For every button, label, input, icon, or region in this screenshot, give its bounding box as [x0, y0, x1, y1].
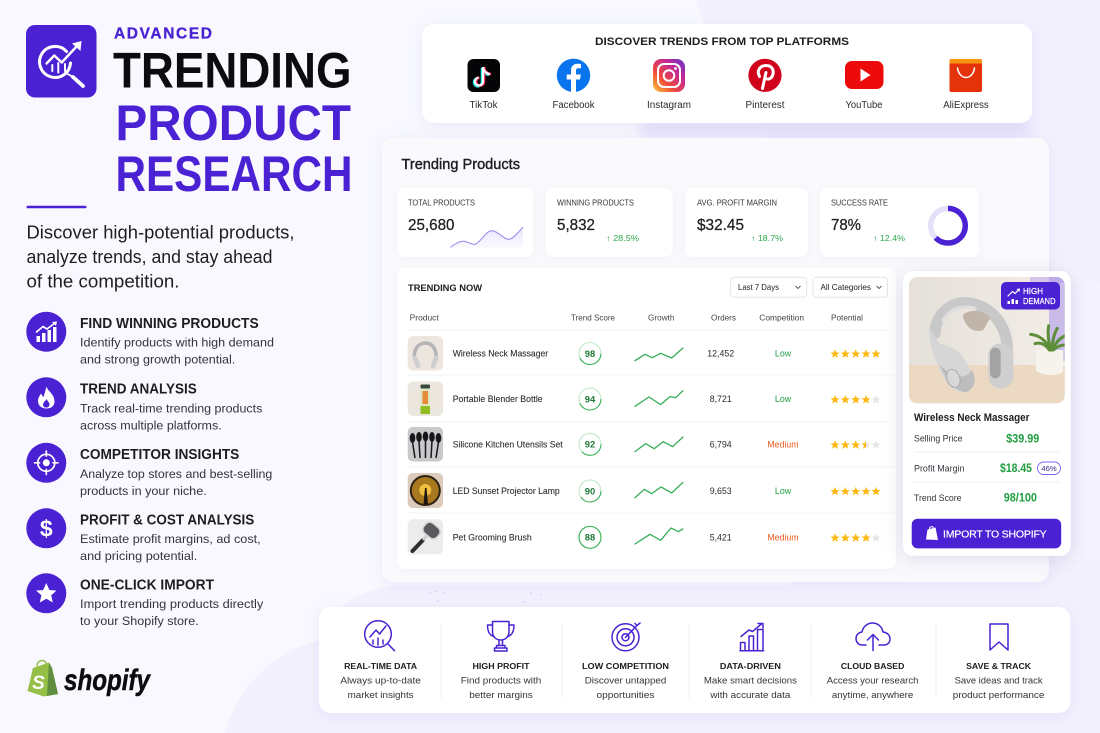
row: wireless neck massager: Wireless Neck Massager [453, 348, 548, 358]
benefit: high profit [461, 622, 541, 700]
panel: platforms [422, 24, 1032, 123]
icon: Facebook: Facebook [552, 100, 595, 111]
stat card: winning products [546, 188, 673, 257]
row: wireless neck massager [408, 336, 881, 370]
row: led sunset projector lamp: LED Sunset Projector Lamp [453, 486, 560, 496]
stat card: total products: TOTAL PRODUCTS [408, 198, 475, 208]
benefit: data-driven [704, 624, 797, 700]
detail: selling price [914, 433, 1039, 445]
feature: find winning products: and strong growth potential. [80, 352, 235, 366]
intro paragraph [26, 222, 294, 292]
feature: competitor insights [26, 443, 272, 498]
detail: profit margin: $18.45 [1000, 463, 1033, 475]
thumbnail: utensils [408, 427, 443, 462]
detail: selling price: $39.99 [1006, 433, 1039, 445]
row: silicone kitchen utensils set: Medium [767, 440, 799, 450]
feature: one-click import [26, 573, 264, 628]
feature: profit and cost analysis [26, 508, 261, 563]
row: portable blender bottle: 8,721 [710, 394, 732, 404]
row: portable blender bottle: 94 [585, 393, 596, 404]
icon: Pinterest: Pinterest [746, 100, 785, 111]
table heading: TRENDING NOW [408, 283, 482, 294]
thumbnail: lamp [408, 473, 443, 508]
table header row [410, 314, 863, 322]
feature: competitor insights: COMPETITOR INSIGHTS [80, 447, 239, 463]
benefit: real-time data [340, 621, 421, 700]
benefit: high profit: Find products with [461, 676, 541, 686]
benefit: data-driven: Make smart decisions [704, 676, 797, 686]
icon: YouTube: YouTube [846, 100, 883, 111]
intro paragraph: of the competition. [26, 272, 179, 292]
badge: high demand: DEMAND [1023, 296, 1056, 306]
icon: AliExpress: AliExpress [943, 100, 989, 111]
benefit: real-time data: REAL-TIME DATA [344, 661, 417, 671]
row: led sunset projector lamp: Low [775, 486, 792, 496]
intro paragraph: analyze trends, and stay ahead [26, 247, 272, 267]
benefit: high profit: better margins [469, 690, 533, 700]
benefit: cloud based [827, 623, 918, 700]
stat card: winning products: ↑ 28.5% [606, 233, 640, 243]
icon: YouTube [845, 61, 884, 111]
title: RESEARCH [116, 146, 352, 202]
feature: profit and cost analysis: $ [40, 516, 53, 542]
thumbnail: brush [408, 519, 443, 554]
row: silicone kitchen utensils set: 92 [585, 439, 595, 450]
title [113, 26, 352, 202]
row: led sunset projector lamp: 90 [585, 485, 595, 496]
table header row: Growth [648, 314, 674, 322]
detail: profit margin: Profit Margin [914, 464, 964, 474]
feature: trend analysis: TREND ANALYSIS [80, 382, 197, 398]
row: wireless neck massager: Low [775, 348, 792, 358]
table header row: Potential [831, 314, 863, 322]
table header row: Trend Score [571, 314, 616, 322]
benefit: save and track: Save ideas and track [955, 676, 1043, 686]
feature: profit and cost analysis: PROFIT & COST ANALYSIS [80, 512, 254, 528]
table header row: Product [410, 314, 440, 322]
row: pet grooming brush [408, 519, 881, 554]
detail: trend score: 98/100 [1004, 493, 1037, 505]
stat card: winning products: 5,832 [557, 217, 595, 234]
feature: trend analysis [26, 377, 262, 432]
row: pet grooming brush: 88 [585, 532, 595, 543]
row: pet grooming brush: 5,421 [710, 532, 732, 542]
panel: product detail card [903, 271, 1071, 556]
icon: TikTok: TikTok [470, 100, 498, 111]
icon: TikTok [468, 59, 500, 111]
icon: Facebook [552, 59, 595, 111]
stat card: success rate [820, 188, 979, 257]
intro paragraph: Discover high-potential products, [26, 222, 294, 242]
logo icon [26, 25, 96, 98]
feature: one-click import: ONE-CLICK IMPORT [80, 578, 214, 594]
benefit: save and track [953, 624, 1044, 700]
badge: high demand [1001, 282, 1060, 310]
detail: trend score: Trend Score [914, 493, 962, 503]
icon: Instagram: Instagram [647, 100, 691, 111]
shopify logo: S [32, 673, 45, 694]
row: portable blender bottle: Low [775, 394, 792, 404]
feature: competitor insights: Analyze top stores and best-selling [80, 467, 272, 481]
panel: trending table [397, 268, 896, 569]
product name: Wireless Neck Massager [914, 412, 1030, 424]
stat card: total products [398, 188, 534, 257]
detail: selling price: Selling Price [914, 434, 962, 444]
shopify logo: shopify [64, 664, 151, 697]
button: import to shopify: IMPORT TO SHOPIFY [943, 528, 1047, 540]
feature: find winning products [26, 312, 274, 366]
benefit: real-time data: Always up-to-date [340, 676, 421, 686]
feature: one-click import: Import trending products directly [80, 597, 264, 611]
title: PRODUCT [116, 95, 351, 151]
benefit: real-time data: market insights [348, 690, 414, 700]
benefit: save and track: SAVE & TRACK [966, 661, 1032, 671]
feature: find winning products: FIND WINNING PRODUCTS [80, 316, 259, 332]
row: portable blender bottle: Portable Blender Bottle [453, 394, 543, 404]
benefit: low competition: Discover untapped [585, 676, 666, 686]
row: silicone kitchen utensils set: Silicone Kitchen Utensils Set [453, 440, 563, 450]
feature: profit and cost analysis: Estimate profit margins, ad cost, [80, 532, 261, 546]
benefit: cloud based: anytime, anywhere [832, 690, 913, 700]
benefit: low competition: opportunities [596, 690, 655, 700]
benefit: data-driven: DATA-DRIVEN [720, 661, 781, 671]
dropdown: date range [731, 277, 807, 297]
feature: trend analysis: Track real-time trending products [80, 401, 262, 415]
benefit: data-driven: with accurate data [709, 690, 790, 700]
detail: profit margin [914, 462, 1060, 475]
row: wireless neck massager: 98 [585, 348, 595, 359]
badge: high demand: HIGH [1023, 286, 1043, 296]
row: led sunset projector lamp: 9,653 [710, 486, 732, 496]
button: import to shopify [912, 519, 1061, 548]
panel: dashboard [382, 138, 1049, 582]
stat card: success rate: SUCCESS RATE [831, 198, 888, 208]
dropdown: category [813, 277, 888, 297]
row: silicone kitchen utensils set [408, 427, 881, 462]
stat card: average profit margin: AVG. PROFIT MARGIN [697, 198, 777, 208]
benefit: low competition [582, 623, 669, 700]
row: pet grooming brush: Pet Grooming Brush [453, 532, 532, 542]
row: silicone kitchen utensils set: 6,794 [710, 440, 732, 450]
feature: profit and cost analysis: and pricing potential. [80, 549, 197, 563]
platforms heading: DISCOVER TRENDS FROM TOP PLATFORMS [595, 36, 849, 48]
stat card: success rate: ↑ 12.4% [873, 233, 906, 243]
benefit: cloud based: Access your research [827, 676, 918, 686]
thumbnail: massager [408, 336, 443, 370]
feature list [26, 312, 274, 628]
row: wireless neck massager: 12,452 [707, 348, 734, 358]
shopify logo [28, 660, 151, 697]
stat card: success rate: 78% [831, 217, 861, 234]
stat card: average profit margin: $32.45 [697, 217, 744, 234]
feature: competitor insights: products in your niche. [80, 484, 207, 498]
feature: find winning products: Identify products with high demand [80, 336, 274, 350]
detail: profit margin: 46% [1041, 464, 1057, 473]
title: ADVANCED [114, 26, 212, 42]
title: TRENDING [113, 42, 352, 98]
icon: AliExpress [943, 59, 989, 111]
row: pet grooming brush: Medium [767, 532, 799, 542]
icon: Pinterest [746, 59, 785, 111]
feature: trend analysis: across multiple platforms. [80, 418, 222, 432]
row: led sunset projector lamp [408, 473, 881, 508]
row: portable blender bottle [408, 382, 881, 416]
benefit: save and track: product performance [953, 690, 1044, 700]
table header row: Competition [759, 314, 804, 322]
table header row: Orders [711, 314, 736, 322]
benefit: cloud based: CLOUD BASED [841, 661, 904, 671]
stat card: average profit margin: ↑ 18.7% [751, 233, 784, 243]
thumbnail: bottle [408, 382, 443, 416]
dropdown: date range: Last 7 Days [738, 282, 779, 292]
stat card: average profit margin [685, 188, 808, 257]
icon: Instagram [647, 59, 691, 111]
benefit: low competition: LOW COMPETITION [582, 661, 669, 671]
panel: benefits [319, 607, 1070, 713]
stat card: total products: 25,680 [408, 217, 455, 234]
dropdown: category: All Categories [820, 282, 871, 292]
benefit: high profit: HIGH PROFIT [472, 661, 530, 671]
stat card: winning products: WINNING PRODUCTS [557, 198, 634, 208]
detail: trend score [914, 493, 1037, 505]
dashboard heading: Trending Products [402, 157, 520, 173]
product photo [909, 277, 1065, 404]
feature: one-click import: to your Shopify store. [80, 614, 199, 628]
